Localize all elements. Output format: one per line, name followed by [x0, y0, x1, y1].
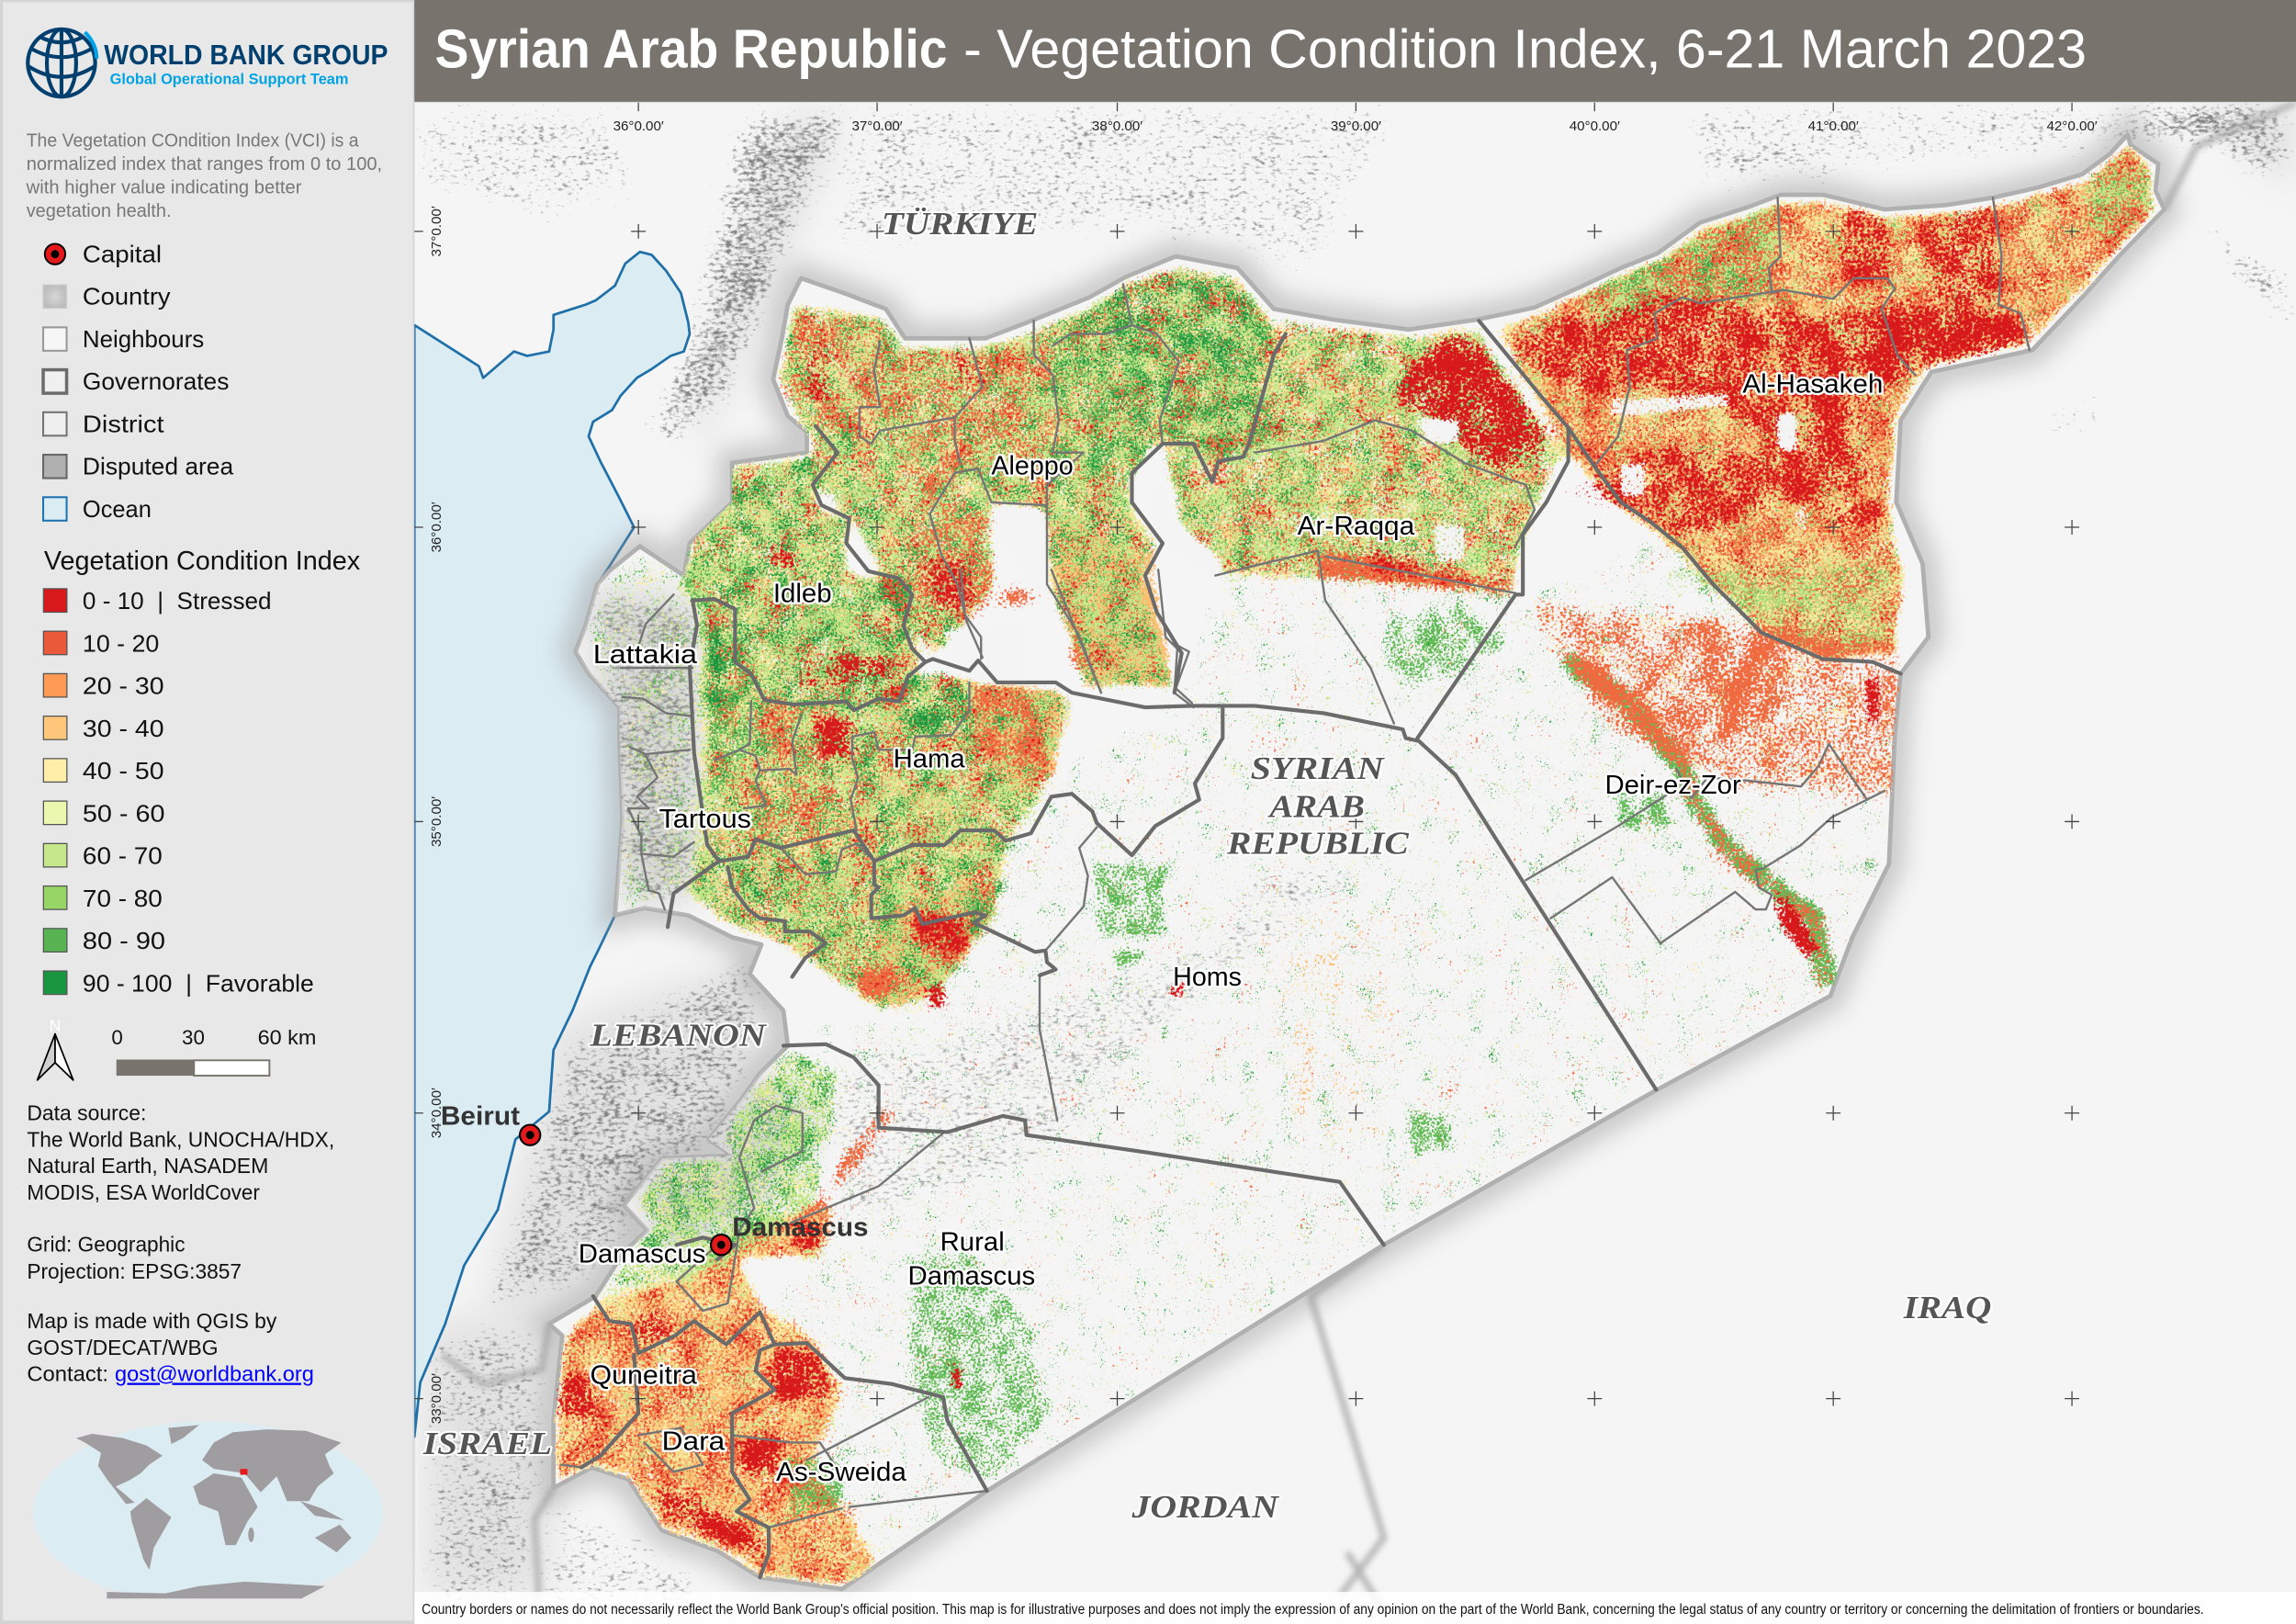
- text block: data sources and contact: GOST/DECAT/WBG: [27, 1336, 219, 1359]
- veg class 10-20 orange: [554, 141, 2160, 1589]
- governorate labels: Damascus: [579, 1239, 705, 1269]
- veg class 80-90 green: [586, 141, 2160, 1567]
- vegetation condition raster: [554, 141, 2160, 1589]
- logo: World Bank Group: [28, 29, 388, 96]
- longitude ticks and labels: 36°0.00′: [613, 118, 664, 134]
- logo: World Bank Group: WORLD BANK GROUP: [104, 40, 388, 71]
- unvegetated areas: [937, 391, 1808, 688]
- governorate labels: Hama: [894, 744, 965, 773]
- legend item: country: Country: [83, 285, 171, 310]
- icon: north arrow: N: [50, 1016, 61, 1034]
- text block: VCI description: normalized index that ranges from 0 to 100,: [27, 154, 382, 175]
- capital: Beirut: [441, 1101, 540, 1145]
- swatch 10-20: 10 - 20: [83, 631, 159, 657]
- governorate labels: Dara: [662, 1427, 725, 1456]
- icon: globe: [28, 29, 96, 96]
- governorate labels: As-Sweida: [776, 1458, 906, 1487]
- legend item: country: [43, 285, 171, 310]
- governorate labels: Lattakia: [593, 640, 697, 670]
- legend item: district: District: [83, 412, 164, 437]
- veg overlay: lime zones: [747, 164, 2153, 952]
- capital: Beirut: Beirut: [441, 1101, 520, 1131]
- longitude ticks and labels: 39°0.00′: [1331, 118, 1381, 134]
- text block: data sources and contact: Natural Earth, NASADEM: [27, 1154, 268, 1178]
- text block: data sources and contact: Grid: Geographic: [27, 1232, 186, 1256]
- country labels: ISRAEL: [422, 1426, 552, 1461]
- legend: VCI classes: [43, 589, 314, 997]
- swatch 60-70: 60 - 70: [83, 844, 163, 870]
- footer disclaimer: [414, 1592, 2296, 1624]
- swatch 60-70: [43, 843, 163, 870]
- longitude ticks and labels: [613, 103, 2098, 134]
- swatch 40-50: 40 - 50: [83, 759, 164, 784]
- capital: Damascus: [711, 1213, 868, 1255]
- country labels: TÜRKIYE: [882, 206, 1038, 242]
- logo: World Bank Group: Global Operational Support Team: [110, 71, 348, 88]
- swatch 50-60: [43, 801, 165, 827]
- desert relief inside Syria: [586, 586, 1391, 1259]
- ocean: [414, 252, 690, 1437]
- scale bar: [111, 1026, 316, 1076]
- veg class 40-50 pale: [554, 141, 2160, 1589]
- country labels: JORDAN: [1131, 1489, 1280, 1525]
- text block: VCI description: vegetation health.: [27, 201, 172, 221]
- swatch 40-50: [43, 759, 164, 784]
- text block: data sources and contact: The World Bank, UNOCHA/HDX,: [27, 1127, 334, 1151]
- country labels: REPUBLIC: [1226, 826, 1409, 862]
- text block: VCI description: The Vegetation COndition Index (VCI) is a: [27, 130, 360, 151]
- swatch 80-90: 80 - 90: [83, 929, 165, 954]
- latitude ticks and labels: 37°0.00′: [429, 206, 445, 256]
- text block: data sources and contact: gost@worldbank.org: [115, 1361, 314, 1385]
- swatch 20-30: 20 - 30: [83, 674, 164, 700]
- governorate labels: Damascus: [908, 1261, 1035, 1291]
- latitude ticks and labels: 35°0.00′: [429, 796, 445, 847]
- longitude ticks and labels: 41°0.00′: [1808, 118, 1859, 134]
- country labels: LEBANON: [589, 1017, 768, 1053]
- panel: legend sidebar: [3, 2, 413, 1620]
- latitude ticks and labels: 36°0.00′: [429, 502, 445, 553]
- coastal and Damascus relief wash: [586, 586, 820, 1259]
- swatch 30-40: [43, 716, 164, 742]
- title bar: [414, 0, 2296, 102]
- legend: map layers: [43, 242, 234, 523]
- legend item: capital: Capital: [83, 242, 162, 267]
- governorate labels: Deir-ez-Zor: [1604, 771, 1741, 800]
- capital markers: [441, 1101, 868, 1255]
- text block: VCI description: with higher value indicating better: [26, 177, 302, 197]
- Syria outer glow: [549, 135, 2165, 1589]
- swatch 0-10: 0 - 10 | Stressed: [83, 589, 272, 615]
- neighbour border shadows: [443, 103, 2296, 1611]
- longitude ticks and labels: 40°0.00′: [1570, 118, 1620, 134]
- legend item: disputed area: Disputed area: [83, 455, 234, 480]
- governorate labels: Aleppo: [991, 452, 1074, 481]
- scale bar: 60 km: [258, 1026, 316, 1049]
- country labels: [422, 206, 1991, 1525]
- country labels: SYRIAN: [1251, 750, 1386, 786]
- icon: north arrow: [38, 1016, 73, 1080]
- graticule crosses: [631, 224, 2079, 1406]
- swatch 30-40: 30 - 40: [83, 716, 164, 742]
- governorate labels: Homs: [1173, 963, 1242, 992]
- veg overlay: yellow zones: [579, 183, 2109, 1574]
- swatch 20-30: [43, 673, 164, 700]
- swatch 50-60: 50 - 60: [83, 801, 165, 827]
- boundaries: districts: [561, 197, 2030, 1528]
- locator world map: [33, 1421, 383, 1605]
- governorate labels: Ar-Raqqa: [1298, 512, 1414, 541]
- legend item: capital: [45, 242, 162, 267]
- swatch 70-80: 70 - 80: [83, 886, 163, 912]
- boundaries: governorates: [581, 321, 1901, 1577]
- legend item: ocean: [43, 497, 152, 523]
- text block: data sources and contact: Map is made with QGIS by: [27, 1309, 277, 1333]
- longitude ticks and labels: 38°0.00′: [1092, 118, 1142, 134]
- country labels: ARAB: [1267, 789, 1365, 825]
- swatch 90-100: 90 - 100 | Favorable: [83, 971, 314, 997]
- legend item: ocean: Ocean: [83, 497, 152, 523]
- hillshade: neighbouring relief: [414, 103, 2296, 1624]
- Syria country fill and border: [549, 135, 2165, 1589]
- swatch 70-80: [43, 886, 163, 912]
- latitude ticks and labels: 34°0.00′: [429, 1088, 445, 1138]
- country labels: IRAQ: [1903, 1290, 1991, 1325]
- veg class 0-10 red: [554, 141, 2160, 1589]
- text block: data sources and contact: Data source:: [27, 1101, 146, 1125]
- swatch 10-20: [43, 631, 159, 657]
- veg class 30-40 light orange: [554, 141, 2160, 1589]
- longitude ticks and labels: 42°0.00′: [2046, 118, 2098, 134]
- governorate labels: Idleb: [773, 579, 832, 608]
- map base land: [414, 103, 2296, 1624]
- text block: data sources and contact: [27, 1101, 334, 1385]
- soft relief wash: [424, 103, 2296, 1596]
- legend item: district: [43, 412, 164, 437]
- text block: data sources and contact: Contact:: [27, 1361, 108, 1385]
- legend item: neighbours: Neighbours: [83, 327, 204, 353]
- scale bar: 0: [111, 1026, 123, 1049]
- panel: map: [414, 103, 2296, 1624]
- text block: VCI description: [26, 130, 382, 221]
- scale bar: 30: [182, 1026, 205, 1049]
- governorate labels: [579, 369, 1883, 1487]
- veg class 90-100 dark green: [593, 220, 1901, 1567]
- legend item: governorates: Governorates: [83, 369, 229, 395]
- longitude ticks and labels: 37°0.00′: [851, 118, 903, 134]
- governorate labels: Rural: [940, 1228, 1005, 1257]
- veg class 60-70 lime: [554, 141, 2160, 1589]
- text block: data sources and contact: MODIS, ESA WorldCover: [27, 1180, 260, 1204]
- latitude ticks and labels: [414, 206, 445, 1424]
- governorate labels: Quneitra: [591, 1361, 697, 1391]
- governorate labels: Al-Hasakeh: [1742, 369, 1883, 399]
- text block: data sources and contact: Projection: EPSG:3857: [27, 1259, 242, 1283]
- title bar: - Vegetation Condition Index, 6-21 March 2023: [963, 18, 2087, 79]
- governorate labels: Tartous: [658, 805, 751, 834]
- capital: Damascus: Damascus: [732, 1213, 868, 1243]
- swatch 80-90: [43, 929, 165, 954]
- latitude ticks and labels: 33°0.00′: [429, 1373, 445, 1424]
- heading: Vegetation Condition Index: Vegetation Condition Index: [44, 547, 361, 576]
- title bar: Syrian Arab Republic: [435, 18, 948, 79]
